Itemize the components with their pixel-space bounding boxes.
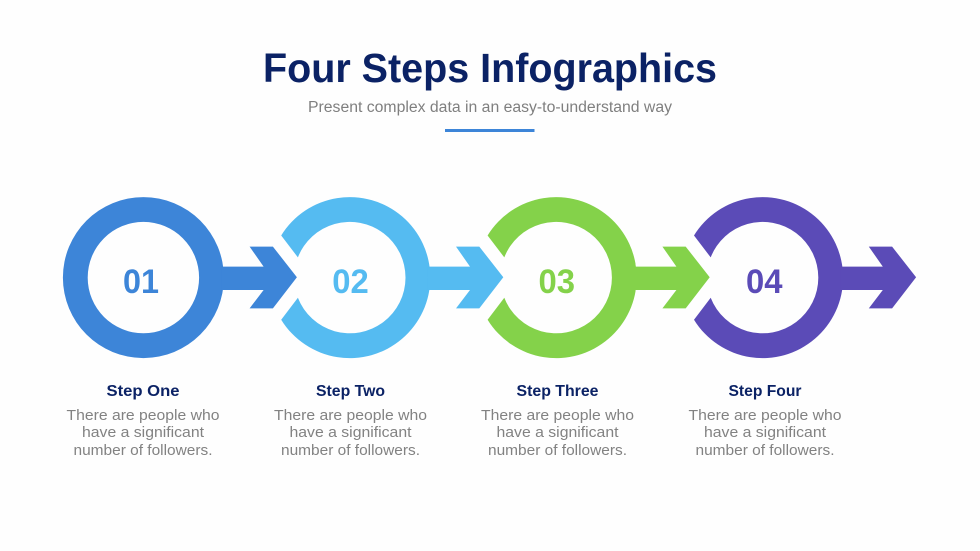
heading underline <box>445 129 534 132</box>
step 4 text <box>688 407 842 459</box>
step 3 text: number of followers. <box>488 442 627 459</box>
step 4 caption <box>688 383 842 459</box>
step 1 caption <box>66 383 220 459</box>
step 4 text: number of followers. <box>696 442 834 459</box>
step 3 heading: Step Three <box>516 383 599 400</box>
step 2 text: There are people who <box>274 407 427 424</box>
arrow 2 <box>428 247 503 308</box>
ring 4 <box>694 197 843 358</box>
number 02: 02 <box>332 263 369 301</box>
number 01: 01 <box>123 263 159 301</box>
step 3 caption <box>481 383 634 459</box>
step 2 text: have a significant <box>290 424 412 441</box>
step 4 graphic <box>694 197 916 358</box>
ring 1 <box>63 197 224 358</box>
step 1 heading: Step One <box>106 383 180 400</box>
ring 2 <box>281 197 430 358</box>
arrow 4 <box>841 247 916 308</box>
arrow 3 <box>634 247 710 308</box>
step 2 caption <box>274 383 427 459</box>
number 03: 03 <box>538 263 575 301</box>
number 04: 04 <box>746 263 783 301</box>
subtitle: Present complex data in an easy-to-understand way <box>308 99 672 116</box>
step 3 text <box>481 407 634 459</box>
step 1 text: There are people who <box>66 407 220 424</box>
step 4 text: have a significant <box>704 424 827 441</box>
step 2 graphic <box>281 197 503 358</box>
step 2 text: number of followers. <box>281 442 420 459</box>
title: Four Steps Infographics <box>263 45 717 91</box>
step 1 graphic <box>63 197 297 358</box>
step 2 text <box>274 407 427 459</box>
step 3 graphic <box>488 197 710 358</box>
step 1 text: number of followers. <box>74 442 213 459</box>
step 1 text <box>66 407 220 459</box>
step 1 text: have a significant <box>82 424 205 441</box>
ring 3 <box>488 197 637 358</box>
step 2 heading: Step Two <box>316 383 385 400</box>
step 4 heading: Step Four <box>728 383 802 400</box>
step 3 text: There are people who <box>481 407 634 424</box>
arrow 1 <box>221 247 297 308</box>
step 4 text: There are people who <box>688 407 842 424</box>
step 3 text: have a significant <box>496 424 619 441</box>
